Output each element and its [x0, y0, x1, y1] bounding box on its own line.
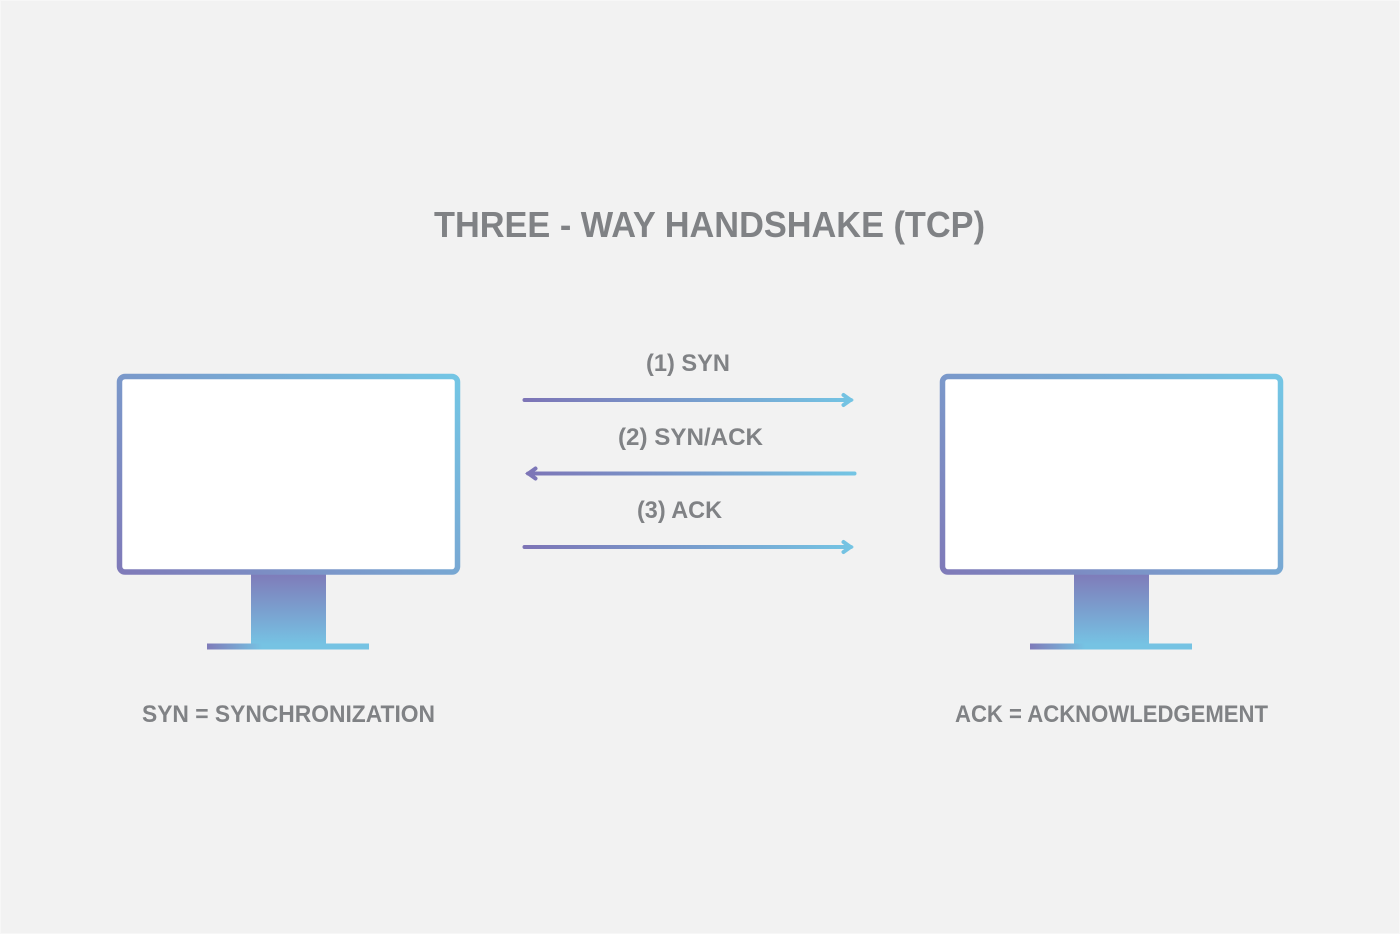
- left computer monitor: [120, 376, 458, 650]
- right monitor screen: [942, 376, 1280, 572]
- right computer monitor: [942, 376, 1280, 650]
- arrow: SYN, left to right: [524, 395, 851, 405]
- label: step 2 SYN/ACK: (2) SYN/ACK: [618, 424, 764, 451]
- arrow: ACK, left to right: [524, 542, 851, 552]
- label: step 3 ACK: (3) ACK: [637, 497, 723, 524]
- right monitor stand: [1074, 574, 1149, 644]
- caption: SYN definition: SYN = SYNCHRONIZATION: [142, 701, 435, 728]
- label: step 1 SYN: (1) SYN: [646, 350, 730, 377]
- left monitor stand: [251, 574, 326, 644]
- title: THREE - WAY HANDSHAKE (TCP): [434, 204, 985, 245]
- caption: ACK definition: ACK = ACKNOWLEDGEMENT: [955, 701, 1268, 728]
- right monitor base: [1030, 644, 1192, 650]
- arrow: SYN/ACK, right to left: [528, 468, 854, 478]
- left monitor base: [207, 644, 369, 650]
- left monitor screen: [120, 376, 458, 572]
